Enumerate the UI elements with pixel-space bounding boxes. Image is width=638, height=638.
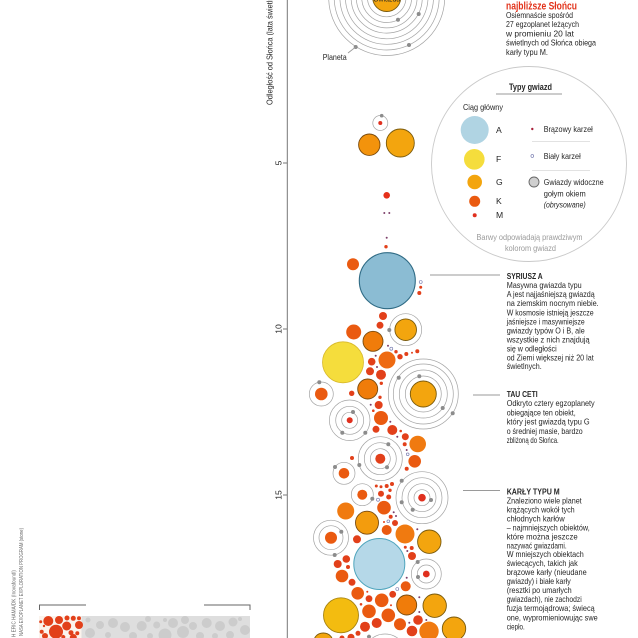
- vertical distance axis: 10: [274, 324, 284, 334]
- star cluster 15-20 light years: [314, 501, 466, 638]
- callout: Tau Ceti: [473, 389, 595, 445]
- callout: Tau Ceti: Odkryto cztery egzoplanety: [507, 398, 595, 408]
- legend: other objects: Brązowy karzeł: [544, 124, 593, 134]
- callout: M dwarfs: W mniejszych obiektach: [507, 549, 584, 559]
- diagram key: star with planets: Planeta: [323, 52, 347, 62]
- text block: stars nearest the Sun: karły typu M.: [506, 47, 548, 57]
- legend: other objects: gołym okiem: [544, 188, 586, 198]
- text block: stars nearest the Sun: świetlnych od Słońca obiega: [506, 38, 596, 48]
- callout: M dwarfs: krążących wokół tych: [507, 504, 575, 514]
- callout: Sirius A: się w odległości: [507, 344, 557, 354]
- callout: Sirius A: SYRIUSZ A: [507, 271, 543, 281]
- legend panel: star types: [432, 66, 626, 262]
- text block: stars nearest the Sun: 27 egzoplanet leżących: [506, 19, 579, 29]
- callout: M dwarfs: nazywać gwiazdami.: [507, 540, 567, 550]
- callout: Sirius A: wszystkie z nich znajdują: [506, 334, 590, 344]
- callout: M dwarfs: KARŁY TYPU M: [507, 486, 560, 496]
- legend: main sequence: A: [496, 125, 502, 135]
- legend note: [476, 232, 582, 253]
- callout: Sirius A: W kosmosie istnieją jeszcze: [507, 308, 594, 318]
- callout: Sirius A: Masywna gwiazda typu: [507, 280, 582, 290]
- callout: M dwarfs: (resztki po umarłych: [507, 585, 572, 595]
- legend: other objects: (obrysowane): [544, 200, 586, 210]
- callout: Tau Ceti: o średniej masie, bardzo: [507, 426, 583, 436]
- callout: M dwarfs: ciepło.: [507, 622, 525, 632]
- callout: M dwarfs: które można jeszcze: [507, 532, 578, 542]
- star cluster 12-15 light years: [309, 380, 448, 524]
- star: Sirius A: [359, 253, 415, 309]
- legend heading: Typy gwiazd: [509, 82, 552, 92]
- source credits: [12, 528, 25, 637]
- callout: M dwarfs: chłodnych karłów: [507, 514, 565, 524]
- legend: other objects: Biały karzeł: [544, 151, 581, 161]
- vertical distance axis: 15: [274, 490, 284, 500]
- legend: main sequence: F: [496, 154, 501, 164]
- legend: other objects: [529, 124, 604, 210]
- callout: Tau Ceti: obiegające ten obiekt,: [507, 408, 576, 418]
- nearest stars cluster: [359, 114, 414, 248]
- callout: M dwarfs: brązowe karły (nieudane: [507, 567, 587, 577]
- callout: Tau Ceti: TAU CETI: [507, 389, 538, 399]
- legend: main sequence: K: [496, 196, 502, 206]
- diagram key: star with planets: [323, 0, 445, 62]
- callout: Tau Ceti: który jest gwiazdą typu G: [507, 416, 590, 426]
- vertical distance axis: 5: [274, 160, 284, 165]
- legend: main sequence: [461, 102, 504, 220]
- callout: Sirius A: jaśniejsze i masywniejsze: [506, 316, 585, 326]
- callout: M dwarfs: one, wypromieniowując swe: [507, 612, 598, 622]
- text block: stars nearest the Sun: najbliższe Słońcu: [506, 0, 577, 12]
- star cluster 10 light years: [322, 258, 422, 399]
- text block: stars nearest the Sun: [505, 0, 596, 57]
- legend note: Barwy odpowiadają prawdziwym: [476, 232, 582, 242]
- proportion bar with brackets: [39, 605, 250, 638]
- source credits: H ERIC HAMA/DK (Inovafoundl): [12, 570, 18, 637]
- legend: main sequence: Ciąg główny: [463, 102, 504, 112]
- callout: M dwarfs: świecących, takich jak: [507, 558, 578, 568]
- legend: other objects: Gwiazdy widoczne: [544, 177, 604, 187]
- callout: Sirius A: od Ziemi większej niż 20 lat: [507, 352, 594, 362]
- callout: Sirius A: świetlnych.: [507, 361, 542, 371]
- star system: Tau Ceti: [388, 359, 458, 429]
- callout: M dwarfs: [463, 486, 598, 632]
- legend: main sequence: G: [496, 177, 503, 187]
- callout: M dwarfs: gwiazdach), nie zachodzi: [507, 594, 582, 604]
- callout: Sirius A: na ziemskim nocnym niebie.: [507, 298, 599, 308]
- callout: M dwarfs: fuzja termojądrowa; świecą: [507, 603, 595, 613]
- callout: M dwarfs: gwiazdy) i białe karły: [507, 576, 571, 586]
- callout: Tau Ceti: zbliżoną do Słońca.: [507, 435, 559, 445]
- text block: stars nearest the Sun: Osiemnaście spośród: [506, 10, 573, 20]
- legend: main sequence: M: [496, 210, 503, 220]
- callout: M dwarfs: Znaleziono wiele planet: [507, 496, 582, 506]
- legend note: kolorom gwiazd: [505, 243, 556, 253]
- callout: Sirius A: A jest najjaśniejszą gwiazdą: [507, 289, 595, 299]
- text block: stars nearest the Sun: w promieniu 20 lat: [505, 28, 575, 38]
- callout: Sirius A: [430, 271, 599, 371]
- vertical distance axis: [264, 0, 287, 638]
- callout: M dwarfs: – najmniejszych obiektów,: [507, 522, 590, 532]
- callout: Sirius A: gwiazdy typów O i B, ale: [507, 326, 585, 336]
- source credits: NASA EXOPLANET EXPLORATION PROGRAM (stone): [19, 528, 25, 636]
